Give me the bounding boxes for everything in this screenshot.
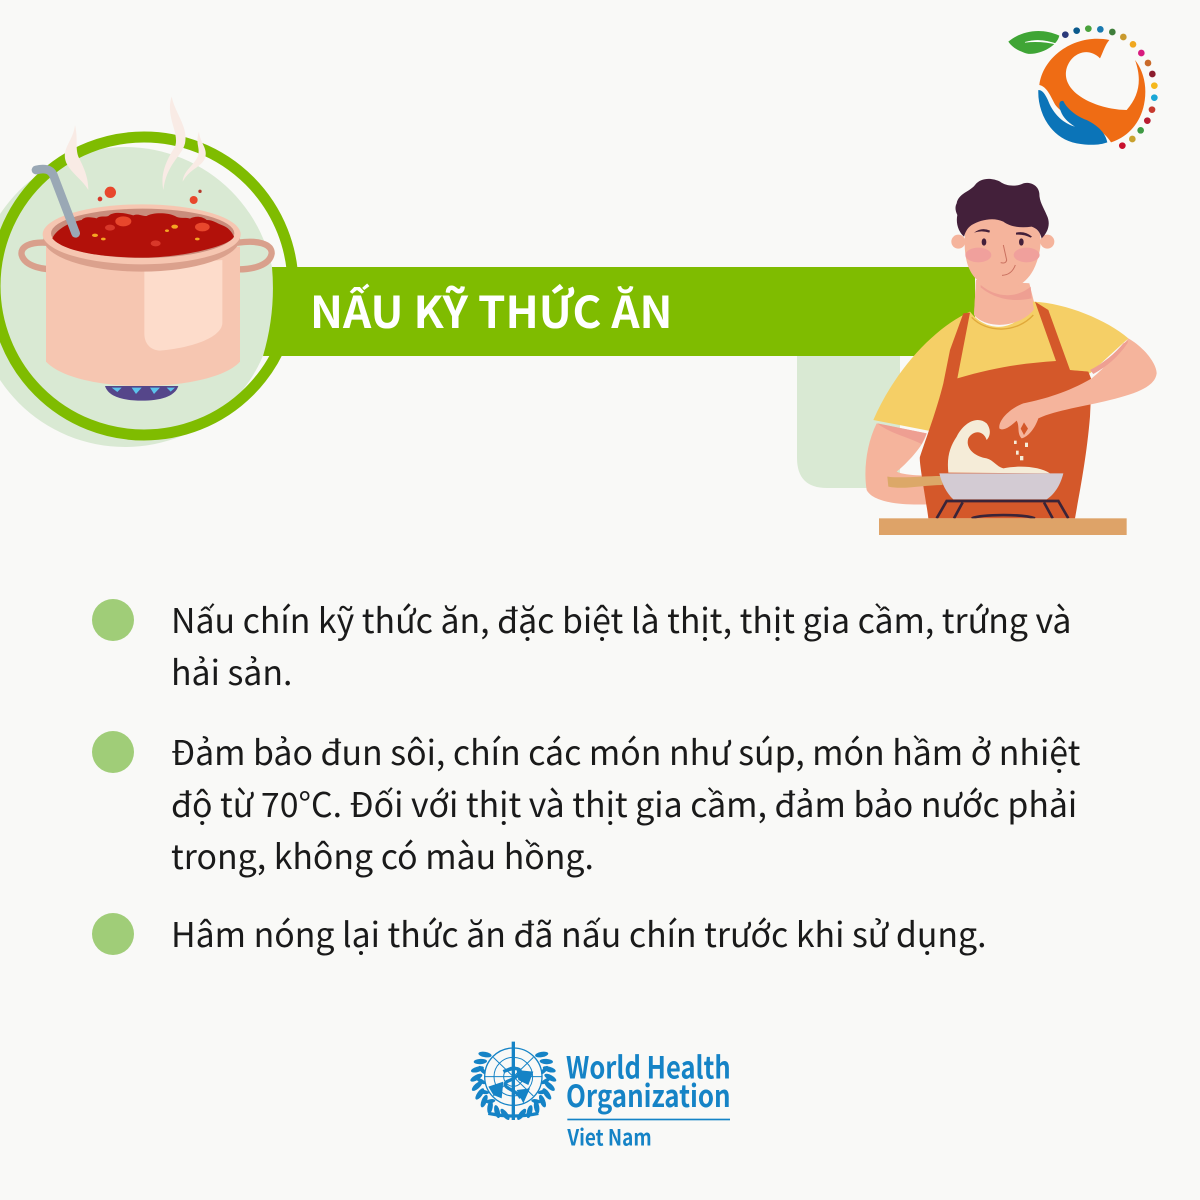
logo: orange heart with hand (1008, 25, 1158, 149)
WHO wordmark: Organization (566, 1071, 731, 1116)
WHO wordmark: World Health (566, 1043, 731, 1088)
neck refill (974, 280, 1034, 325)
burner (105, 386, 178, 401)
ears (951, 235, 1054, 249)
light green circle behind pot (0, 147, 275, 447)
bullet dot 2 (92, 731, 134, 773)
steam from pan (948, 420, 1050, 473)
bullet text 2: độ từ 70°C. Đối với thịt và thịt gia cầm, đảm bảo nước phải (171, 778, 1077, 827)
soup bubbles (92, 187, 210, 246)
sleeve shadow right (1090, 341, 1128, 374)
WHO wordmark (566, 1043, 731, 1152)
soup (52, 213, 234, 258)
stove (937, 501, 1068, 518)
left arm (865, 423, 950, 505)
pan (939, 473, 1063, 499)
bullet dot 3 (92, 913, 134, 955)
pot rim (43, 204, 241, 272)
eyes and brows (974, 229, 1032, 246)
bullet text 3: Hâm nóng lại thức ăn đã nấu chín trước khi sử dụng. (171, 908, 987, 957)
blue hand (1038, 90, 1107, 145)
orange heart shape (1039, 39, 1145, 142)
icon: cooking pot (21, 97, 272, 401)
leaf (1008, 31, 1059, 54)
WHO emblem (469, 1042, 557, 1121)
pot handles (21, 242, 272, 270)
bullet text 1: hải sản. (171, 646, 292, 695)
neck shadow (981, 285, 1032, 300)
WHO wordmark: Viet Nam (566, 1120, 652, 1152)
salt grains (1014, 441, 1028, 460)
bullet text 2 (171, 726, 1080, 879)
bullet text 1 (171, 594, 1071, 695)
collar (972, 315, 1033, 329)
pot body (46, 247, 240, 386)
shirt sleeve shadow (877, 423, 927, 444)
green ring (0, 137, 293, 435)
hair (955, 179, 1049, 238)
pan handle (887, 476, 943, 488)
bullet text 2: trong, không có màu hồng. (171, 830, 594, 879)
neck (974, 280, 1036, 325)
icon: cook sprinkling salt (865, 179, 1157, 535)
yellow shirt (873, 302, 1128, 432)
cheeks (965, 248, 1040, 262)
ladle (36, 169, 76, 233)
colored dots (1062, 25, 1158, 149)
finger gap (1021, 422, 1028, 435)
light green rounded panel behind cook (797, 350, 900, 488)
bullet dot 1 (92, 599, 134, 641)
table (879, 518, 1127, 535)
WHO logo (469, 1042, 731, 1152)
steam (65, 97, 206, 190)
title banner (263, 267, 975, 356)
pot highlight (144, 260, 222, 351)
apron (920, 302, 1092, 518)
bullet text 2: Đảm bảo đun sôi, chín các món như súp, món hầm ở nhiệt (171, 726, 1080, 775)
right arm (999, 338, 1157, 438)
title: NẤU KỸ THỨC ĂN (310, 277, 673, 341)
bullet text 1: Nấu chín kỹ thức ăn, đặc biệt là thịt, thịt gia cầm, trứng và (171, 594, 1071, 643)
nose and smile (1001, 245, 1015, 275)
face (965, 213, 1041, 290)
